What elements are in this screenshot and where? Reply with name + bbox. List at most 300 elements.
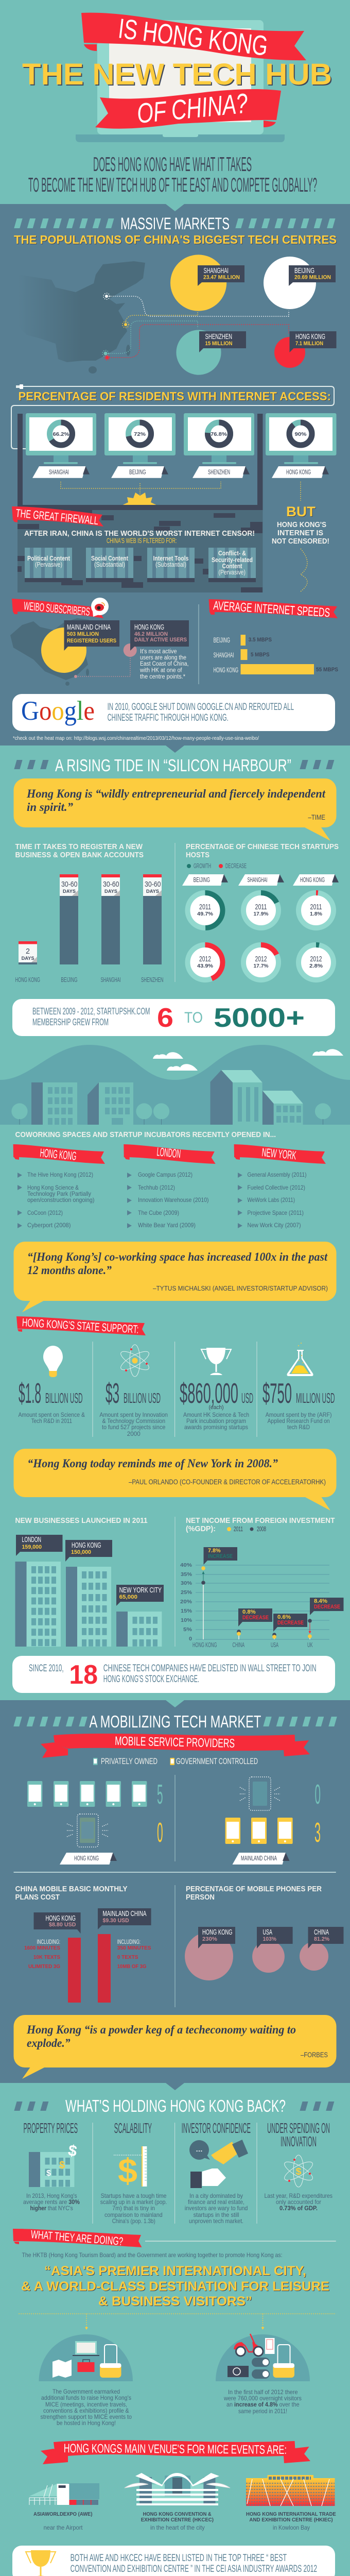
bar: shenzhen: 30-60 (145, 880, 161, 889)
donut: hong kong 2011 (299, 893, 334, 928)
tag: beijing (182, 874, 228, 886)
panel: startupshk membership: 5000+ (214, 1003, 305, 1033)
panel: overnight visitors (216, 2334, 310, 2415)
column: scalability: comparison to mainland (104, 2211, 163, 2218)
heading: coworking spaces: COWORKING SPACES AND STARTUP INCUBATORS RECENTLY OPENED IN... (15, 1130, 276, 1139)
illustration: city skyline (0, 1045, 350, 1125)
text: hktb intro: The HKTB (Hong Kong Tourism Board) and the Government are working together to promote Hong Kong as: (22, 2251, 283, 2259)
panel: internet access (11, 384, 337, 505)
callout: mainland china (64, 620, 119, 651)
callout: hong kong cost: HONG KONG (45, 1914, 76, 1923)
quote: tytus michalski (13, 1242, 337, 1312)
pie: beijing population: 20.69 MILLION (294, 274, 331, 280)
panel: government funding (39, 2334, 133, 2427)
chart: net income from foreign investment: UK (307, 1641, 313, 1649)
tag: hong kong (60, 1853, 117, 1865)
panel: overnight visitors: an increase of 4.8% over the (226, 2401, 300, 2408)
panel: overnight visitors: same period in 2011! (238, 2408, 287, 2415)
ribbon: the great firewall: THE GREAT FIREWALL (15, 506, 99, 527)
monitor: beijing: 72% (134, 432, 146, 437)
text: mainland plan: 0 TEXTS (117, 1954, 138, 1960)
stat: 750 million usd: tech R&D (287, 1423, 310, 1431)
text: google rerouted (108, 702, 294, 723)
building: london: 159,000 (22, 1544, 42, 1550)
callout: usa decrease: 0.6% (277, 1614, 291, 1620)
icon: atom (118, 1345, 151, 1377)
column: property prices: average rents are 30% (23, 2198, 80, 2206)
callout: hong kong: HONG KONG (134, 623, 164, 632)
quote: asia's premier international city: & A WORLD-CLASS DESTINATION FOR LEISURE (21, 2279, 329, 2294)
text: 0 (157, 1817, 163, 1848)
column: scalability: SCALABILITY (114, 2120, 152, 2136)
column: property prices (23, 2120, 80, 2212)
stat: 1.8 billion usd: Tech R&D in 2011 (31, 1417, 72, 1425)
ribbon: hong kong (13, 1144, 105, 1164)
bar: beijing: 30-60 (61, 880, 77, 889)
icon: tourist gear dome (216, 2334, 310, 2381)
panel: delisted companies: 18 (69, 1660, 98, 1690)
chart: mobile phones per person: PERSON (186, 1893, 215, 1902)
quote: paul orlando: “Hong Kong today reminds me of New York in 2008.” (27, 1457, 278, 1470)
callout: hong kong increase (204, 1547, 237, 1565)
text: active users note: the centre points.* (140, 674, 185, 680)
bar: shanghai: DAYS (104, 889, 117, 894)
column: scalability: Startups have a tough time (101, 2192, 167, 2199)
icon: building with dollars: $ (59, 2160, 65, 2171)
icon: laptop (76, 20, 285, 142)
ribbon: weibo: WEIBO SUBSCRIBERS (23, 599, 91, 618)
heading: massive markets: THE POPULATIONS OF CHINA'S BIGGEST TECH CENTRES (14, 233, 337, 246)
callout: but hong kong not censored: NOT CENSORED! (272, 537, 329, 546)
callout: but hong kong not censored: INTERNET IS (277, 529, 323, 537)
venue: hkcec: EXHIBITION CENTRE (HKCEC) (141, 2517, 214, 2523)
list: london spaces (124, 1144, 216, 1229)
stat: 860,000 usd: Amount HK Science & Tech (183, 1411, 249, 1418)
pillar: conflict and security: Content (222, 563, 242, 570)
icon: yellow trophy (26, 2550, 56, 2576)
pillar: social content (86, 548, 133, 582)
bar chart: average internet speeds: HONG KONG (214, 666, 238, 674)
venue: hkiec: in Kowloon Bay (273, 2524, 310, 2531)
callout: usa 103%: USA (262, 1928, 272, 1937)
column: scalability (100, 2120, 167, 2225)
list: london spaces: Google Campus (2012) (138, 1171, 192, 1178)
stat: 3 billion usd: & Technology Commission (102, 1417, 165, 1425)
stat: 860,000 usd: (each) (209, 1404, 223, 1411)
monitor: shenzhen: 76.8% (211, 432, 227, 437)
donut: beijing 2011: 2011 (199, 903, 211, 911)
pillar: internet tools: (Substantial) (155, 561, 186, 568)
building: new york city: 65,000 (119, 1594, 137, 1600)
legend: ownership: PRIVATELY OWNED (101, 1756, 157, 1766)
bar chart: average internet speeds (209, 599, 338, 674)
chart: new businesses launched in 2011: NEW BUSINESSES LAUNCHED IN 2011 (15, 1516, 148, 1525)
column: scalability: scaling up in a market (pop. (100, 2198, 167, 2206)
text: mainland plan: 350 MINUTES (117, 1945, 151, 1951)
stat: 1.8 billion usd: $1.8 (19, 1377, 41, 1409)
pie: beijing population: BEIJING (294, 266, 314, 275)
chart: net income from foreign investment: 0 (189, 1636, 192, 1642)
text: BILLION USD (124, 1390, 161, 1406)
donut: hong kong 2011: 1.8% (310, 911, 323, 917)
pie: shanghai population: 23.47 MILLION (203, 274, 240, 280)
panel: awards (12, 2546, 335, 2576)
ribbon: mobile service providers (41, 1734, 310, 1758)
quote: asia's premier international city: & BUSINESS VISITORS” (98, 2294, 252, 2309)
panel: startupshk membership: MEMBERSHIP GREW FROM (32, 1017, 109, 1027)
icon: starburst (122, 493, 156, 505)
panel: government funding: MICE (meetings, incentive travels, (45, 2401, 127, 2408)
icon: dollar and ruler: $ (118, 2151, 137, 2190)
ribbon: hong kong: HONG KONG (40, 1146, 77, 1163)
venue: asiaworldexpo: ASIAWORLDEXPO (AWE) (33, 2511, 93, 2517)
callout: mainland china cost (98, 1908, 151, 1929)
callout: but hong kong not censored: HONG KONG'S (277, 520, 326, 529)
chart: monthly plans cost: PLANS COST (15, 1893, 60, 1902)
bar: hong kong: DAYS (22, 956, 34, 961)
text: google rerouted: CHINESE TRAFFIC THROUGH HONG KONG. (108, 713, 229, 723)
callout: hong kong cost (34, 1912, 81, 1934)
callout: hong kong increase: 7.8% (208, 1548, 221, 1554)
bar: shanghai: SHANGHAI (101, 976, 121, 984)
text: USD (241, 1390, 253, 1406)
bar chart: average internet speeds: SHANGHAI (214, 651, 234, 659)
callout: hong kong (130, 620, 189, 651)
stat: 3 billion usd (99, 1345, 168, 1437)
callout: mainland china: 503 MILLION (67, 631, 99, 637)
callout: hong kong 230% (198, 1927, 235, 1948)
callout: mainland china cost: $9.30 USD (103, 1918, 129, 1924)
panel: government funding: strengthen support to MICE events to (40, 2413, 132, 2420)
pillar: social content: Social Content (91, 555, 129, 562)
bar: hong kong (15, 941, 40, 984)
bar: beijing (60, 874, 78, 984)
icon: atom with dollar (282, 2155, 315, 2187)
quote: forbes (13, 2015, 337, 2079)
tag: mainland china: MAINLAND CHINA (241, 1854, 277, 1862)
monitor: hong kong (266, 413, 337, 478)
donut: shanghai 2012 (243, 945, 278, 980)
stat: 750 million usd (262, 1343, 335, 1431)
donut: shanghai 2011: 2011 (255, 903, 267, 911)
panel: great firewall: CHINA'S WEB IS FILTERED FOR: (107, 536, 177, 545)
callout: but hong kong not censored (272, 504, 329, 546)
building: london: LONDON (22, 1535, 41, 1544)
icon: flask (287, 1343, 313, 1376)
panel: google callout (12, 694, 335, 731)
legend: ownership (93, 1756, 258, 1766)
panel: weibo subscribers (10, 598, 189, 686)
quote: forbes: explode.” (27, 2037, 71, 2049)
callout: hong kong: DAILY ACTIVE USERS (134, 637, 187, 643)
bar: beijing: DAYS (63, 889, 76, 894)
panel: government funding: additional funds to raise Hong Kong's (41, 2394, 131, 2401)
heading: a mobilizing tech market: A MOBILIZING TECH MARKET (90, 1712, 261, 1731)
quote: time: Hong Kong is “wildly entrepreneurial and fiercely independent (26, 787, 326, 800)
chart: net income from foreign investment: 5% (183, 1626, 192, 1633)
icon: light bulb (43, 1346, 63, 1377)
chart: monthly plans cost: CHINA MOBILE BASIC MONTHLY (15, 1885, 128, 1893)
icon: hkcec building (125, 2473, 230, 2505)
ribbon: the great firewall (12, 506, 103, 527)
legend (227, 1525, 266, 1533)
callout: uk decrease (310, 1598, 344, 1615)
quote: asia's premier international city (21, 2264, 329, 2309)
chart: net income from foreign investment: HONG KONG (192, 1641, 217, 1649)
column: under spending on innovation: 0.73% of GDP. (279, 2205, 318, 2212)
panel: startupshk membership: 6 (157, 1003, 173, 1033)
text: hong kong plan (24, 1938, 60, 1970)
column: investor confidence: In a city dominated by (189, 2192, 243, 2199)
pillar: political content (25, 548, 72, 582)
column: investor confidence: unproven tech market. (189, 2217, 243, 2225)
panel: government funding: The Government earmarked (52, 2388, 120, 2395)
map: china with city markers (18, 261, 289, 374)
building: new york city (116, 1585, 164, 1647)
pie: shenzhen population: 15 MILLION (205, 341, 233, 347)
bar: hong kong: HONG KONG (15, 976, 40, 984)
monitor: hong kong: HONG KONG (286, 468, 311, 476)
tag: mainland china (233, 1853, 289, 1865)
text: 0 (315, 1779, 321, 1810)
callout: mainland china: MAINLAND CHINA (67, 623, 111, 632)
callout: mainland china cost: MAINLAND CHINA (103, 1909, 146, 1918)
callout: china decrease: DECREASE (242, 1615, 269, 1621)
legend: 2011 (234, 1525, 243, 1533)
list: hong kong spaces: Hong Kong Science & (27, 1184, 79, 1191)
icon: cable (11, 384, 334, 449)
callout: china decrease (238, 1608, 272, 1626)
callout: usa decrease: DECREASE (277, 1620, 304, 1626)
ribbon: what they are doing (13, 2228, 142, 2248)
stat: 860,000 usd: awards promising startups (184, 1423, 248, 1431)
tag: hong kong (293, 874, 339, 886)
chart: net income from foreign investment: 40% (180, 1562, 192, 1568)
donut charts: tech startups hosts: HOSTS (186, 851, 209, 859)
stat: 750 million usd: $750 (262, 1377, 292, 1409)
icons: mainland government phones (225, 1818, 293, 1844)
chart: net income from foreign investment: USA (271, 1641, 278, 1649)
bar chart: time to register a business (15, 842, 164, 984)
venue: hkiec: AND EXHIBITION CENTRE (HKIEC) (249, 2517, 333, 2523)
pie: hong kong population (274, 331, 337, 368)
text: hong kong plan: INCLUDING: (37, 1938, 60, 1945)
text: active users note: East Coast of China, (140, 661, 188, 667)
column: property prices: In 2013, Hong Kong's (26, 2192, 77, 2199)
building: hong kong (65, 1540, 112, 1647)
column: scalability: 7m) that is tiny in (112, 2205, 155, 2212)
text: active users note: It's most active (140, 649, 177, 655)
tag: hong kong: HONG KONG (300, 876, 325, 884)
list: new york spaces: New Work City (2007) (247, 1222, 301, 1229)
icon: atom with dollar: $ (295, 2166, 302, 2177)
title: the new tech hub: THE NEW TECH HUB (22, 58, 332, 91)
donut: beijing 2011 (187, 893, 222, 928)
list: hong kong spaces: CoCoon (2012) (27, 1209, 63, 1216)
text: hong kong plan: 10K TEXTS (33, 1954, 60, 1960)
pie: beijing population (264, 257, 336, 309)
list: hong kong spaces: The Hive Hong Kong (2012) (27, 1171, 93, 1178)
stat: 3 billion usd: 2000 (127, 1430, 141, 1437)
text: hong kong plan: ULIMITED 3G (28, 1963, 60, 1970)
panel: great firewall (12, 505, 262, 592)
column: investor confidence (182, 2120, 251, 2225)
panel: overnight visitors: In the first half of 2012 there (228, 2388, 298, 2396)
chart: net income from foreign investment: CHINA (233, 1641, 244, 1649)
donut: shanghai 2012: 17.7% (253, 963, 269, 969)
quote: asia's premier international city: “ASIA'S PREMIER INTERNATIONAL CITY, (44, 2264, 306, 2278)
monitor: shenzhen: SHENZHEN (208, 468, 230, 476)
heading: massive markets: MASSIVE MARKETS (120, 214, 230, 233)
chart: net income from foreign investment: 15% (181, 1608, 192, 1614)
list: new york spaces: Fueled Collective (2012) (247, 1184, 305, 1191)
icon: trophy (201, 1348, 231, 1375)
stat: 3 billion usd: Amount spent by Innovation (99, 1411, 168, 1418)
tag: shanghai: SHANGHAI (247, 876, 268, 884)
callout: hong kong: 46.2 MILLION (134, 631, 168, 637)
text: active users note: users are along the (140, 655, 186, 661)
column: investor confidence: startups in the still (194, 2211, 239, 2218)
text: mainland plan: 10MB OF 3G (117, 1963, 146, 1970)
donut: beijing 2011: 49.7% (197, 911, 214, 917)
panel: delisted companies (12, 1656, 335, 1693)
legend: DECREASE (225, 862, 247, 870)
icon: dollar and ruler (114, 2146, 147, 2190)
donut: hong kong 2012 (299, 945, 334, 980)
ribbon: new york: NEW YORK (261, 1145, 297, 1162)
building: hong kong: 150,000 (71, 1549, 91, 1555)
venue: hkcec: HONG KONG CONVENTION & (143, 2511, 212, 2517)
list: hong kong spaces: open/construction ongoing) (27, 1196, 95, 1204)
legend (187, 862, 247, 870)
quote: tytus michalski: “[Hong Kong’s] co-working space has increased 100x in the past (27, 1250, 328, 1263)
pie: shanghai population (170, 255, 244, 311)
callout: hong kong 230%: HONG KONG (202, 1928, 233, 1937)
list: hong kong spaces (13, 1144, 105, 1229)
text: mainland plan (117, 1938, 151, 1970)
list: hong kong spaces: Technology Park (Partially (27, 1190, 91, 1197)
tag: hong kong: HONG KONG (74, 1854, 99, 1862)
column: investor confidence: finance and real estate, (188, 2198, 244, 2206)
panel: overnight visitors: were 760,000 overnight visitors (223, 2395, 302, 2402)
bar: shenzhen: SHENZHEN (141, 976, 164, 984)
donut charts: tech startups hosts: PERCENTAGE OF CHINESE TECH STARTUPS (186, 842, 339, 851)
text: active users note (139, 649, 188, 680)
footnote: *check out the heat map on: http://blogs.wsj.com/chinarealtime/2013/03/12/how-many-people-really-use-sina-weibo/ (13, 736, 259, 741)
callout: usa 103%: 103% (262, 1936, 276, 1942)
chart: net income from foreign investment: 30% (181, 1580, 192, 1586)
donut: hong kong 2011: 2011 (310, 903, 322, 911)
stat: 3 billion usd: $3 (106, 1377, 119, 1409)
callout: usa 103% (257, 1927, 293, 1948)
ribbon: state support (16, 1316, 146, 1336)
icon: travel gear dome (39, 2334, 133, 2381)
stat: 750 million usd: Applied Research Fund on (268, 1417, 330, 1425)
panel: government funding: conventions & exhibitions) profile & (43, 2407, 129, 2414)
chart: monthly plans cost (15, 1885, 151, 2003)
column: scalability: China's (pop. 1.3b) (112, 2217, 155, 2225)
icon: empty mainland private phone (240, 1777, 280, 1810)
column: under spending on innovation: only accounted for (276, 2198, 321, 2206)
tag: shanghai (238, 874, 284, 886)
pie: hong kong population: 7.1 MILLION (295, 341, 323, 347)
bar chart: time to register a business: TIME IT TAKES TO REGISTER A NEW (15, 842, 143, 851)
bar chart: average internet speeds: 5 MBPS (251, 652, 270, 658)
bar chart: average internet speeds: BEIJING (214, 636, 230, 644)
donut: shanghai 2011 (243, 893, 278, 928)
pillar: conflict and security: Security-related (212, 556, 253, 564)
map: mini china (10, 618, 89, 686)
chart: new businesses launched in 2011 (15, 1516, 164, 1647)
list: hong kong spaces: Cyberport (2008) (27, 1222, 71, 1229)
list: london spaces: The Cube (2009) (138, 1209, 179, 1216)
donut: beijing 2012: 2012 (199, 955, 211, 963)
venue: hkiec: HONG KONG INTERNATIONAL TRADE (246, 2511, 336, 2517)
arrows: dotted connector (19, 2314, 336, 2330)
venue: asiaworldexpo: near the Airport (44, 2524, 83, 2531)
list: new york spaces: Projective Space (2011) (247, 1209, 304, 1216)
callout: hong kong increase: INCREASE (208, 1553, 233, 1560)
icon: empty hong kong government phone (67, 1814, 108, 1847)
bar: beijing: BEIJING (61, 976, 77, 984)
ribbon: london: LONDON (156, 1145, 181, 1161)
ribbon: state support: HONG KONG'S STATE SUPPORT: (22, 1316, 139, 1336)
text: hong kong plan: 1600 MINUTES (24, 1945, 60, 1951)
text: 5 (157, 1779, 163, 1810)
list: new york spaces: WeWork Labs (2011) (247, 1196, 295, 1204)
text: worst internet censor: AFTER IRAN, CHINA IS THE WORLD'S WORST INTERNET CENSOR! (24, 529, 255, 538)
quote: paul orlando (13, 1449, 337, 1511)
donut: shanghai 2011: 17.9% (253, 911, 269, 917)
icon: weibo logo (91, 598, 109, 617)
ribbon: mobile service providers: MOBILE SERVICE PROVIDERS (115, 1734, 235, 1751)
icon: hkiec building (246, 2475, 335, 2506)
list: new york spaces: General Assembly (2011) (247, 1171, 307, 1178)
ribbon: new york (234, 1144, 326, 1164)
panel: government funding: be hosted in Hong Kong! (57, 2419, 116, 2427)
donut: shanghai 2012: 2012 (255, 955, 267, 963)
building: new york city: NEW YORK CITY (119, 1586, 162, 1595)
stat: 860,000 usd: Park incubation program (186, 1417, 246, 1425)
column: property prices: higher that NYC's (30, 2205, 73, 2212)
bar chart: average internet speeds: 3.5 MBPS (249, 637, 272, 643)
chart: net income from foreign investment: 20% (180, 1599, 192, 1605)
quote: tytus michalski: –TYTUS MICHALSKI (ANGEL INVESTOR/STARTUP ADVISOR) (153, 1285, 328, 1292)
donut: beijing 2012: 43.9% (197, 963, 214, 969)
callout: china 81.2% (308, 1927, 344, 1948)
column: under spending on innovation (265, 2120, 332, 2212)
stat: 3 billion usd: to fund 527 projects since (102, 1423, 166, 1431)
building: london (15, 1535, 63, 1647)
chart: net income from foreign investment: 10% (181, 1617, 192, 1623)
stat: 860,000 usd: $860,000 (180, 1377, 238, 1409)
icon: building with dollars: $ (67, 2142, 78, 2160)
callout: uk decrease: 8.4% (314, 1598, 327, 1604)
chart: net income from foreign investment: 25% (181, 1589, 192, 1596)
pillar: internet tools (147, 548, 195, 582)
monitor: shanghai (26, 413, 96, 478)
column: under spending on innovation: Last year, R&D expenditures (265, 2192, 332, 2199)
pillar: conflict and security: Conflict- & (218, 550, 246, 557)
list: london spaces: Innovation Warehouse (2010) (138, 1196, 209, 1204)
donut: hong kong 2012: 2.8% (309, 963, 323, 969)
monitor: hong kong: 90% (294, 432, 307, 437)
callout: hong kong 230%: 230% (202, 1936, 217, 1942)
venue: hkcec (125, 2473, 230, 2531)
bar: shenzhen (141, 874, 164, 984)
text: INVESTOR CONFIDENCE (182, 2120, 251, 2136)
callout: china 81.2%: 81.2% (314, 1936, 329, 1942)
